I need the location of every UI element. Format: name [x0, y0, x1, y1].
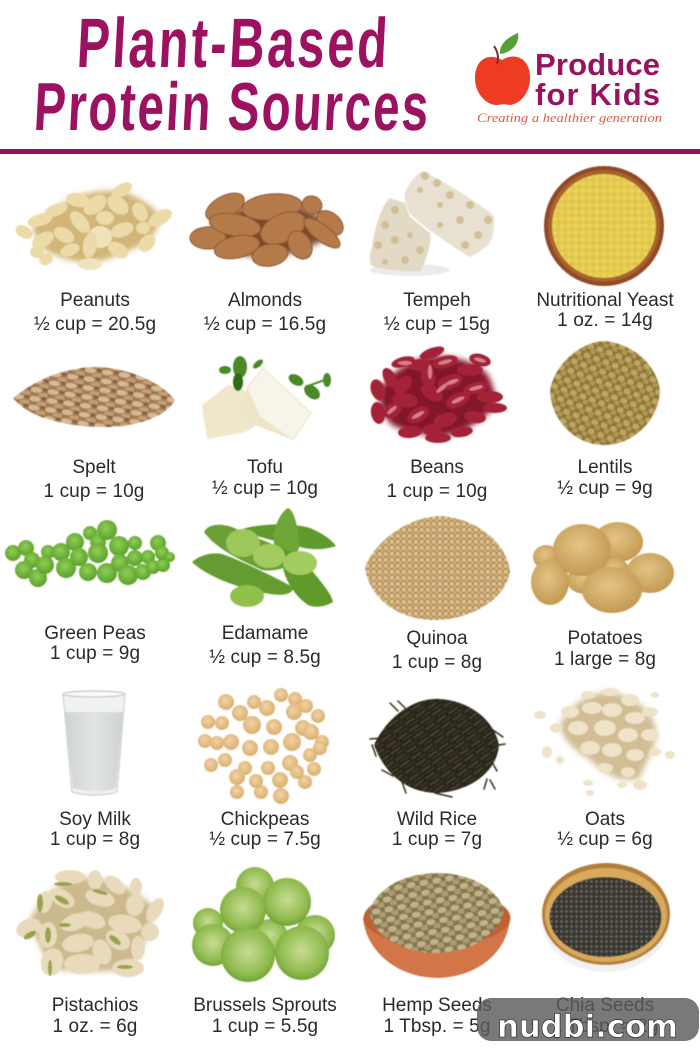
label: chickpeas [209, 809, 321, 850]
title: Plant-Based [75, 3, 389, 82]
icon: green peas [5, 520, 175, 587]
label: lentils: ½ cup = 9g [557, 478, 653, 499]
icon: lentils [550, 341, 660, 445]
icon: quinoa [365, 516, 510, 620]
label: lentils [557, 457, 653, 499]
food: spelt [13, 367, 175, 502]
label: almonds [204, 290, 326, 335]
label: potatoes: Potatoes [568, 628, 642, 649]
label: wild rice [392, 809, 482, 850]
food: wild rice [370, 699, 505, 850]
watermark [477, 998, 699, 1045]
label: oats: ½ cup = 6g [557, 829, 653, 850]
label: hemp seeds: Hemp Seeds [382, 995, 492, 1016]
watermark: nudbi.com [497, 1009, 678, 1045]
label: spelt: Spelt [72, 457, 116, 478]
label: oats: Oats [585, 809, 625, 830]
label: beans: Beans [410, 457, 464, 478]
label: tofu: ½ cup = 10g [212, 478, 318, 499]
label: peanuts [34, 290, 156, 335]
food: quinoa [365, 516, 510, 673]
food: hemp seeds [363, 873, 510, 1037]
food: nutritional yeast [536, 166, 674, 331]
logo wordmark [535, 47, 660, 112]
label: edamame: Edamame [222, 623, 308, 644]
label: brussels sprouts: Brussels Sprouts [193, 995, 337, 1016]
food: beans [368, 344, 507, 502]
logo: Produce for Kids [475, 33, 662, 125]
food: brussels sprouts [192, 867, 337, 1037]
label: soy milk [50, 809, 140, 850]
label: tempeh: ½ cup = 15g [384, 314, 490, 335]
label: chia seeds: 1 Tbsp. = 2g [551, 1016, 659, 1037]
label: peanuts: ½ cup = 20.5g [34, 314, 156, 335]
label: brussels sprouts [193, 995, 337, 1037]
label: lentils: Lentils [578, 457, 632, 478]
food: tofu [203, 356, 331, 499]
label: tofu [212, 457, 318, 499]
food: almonds [190, 187, 348, 335]
food: oats [534, 688, 675, 850]
icon: spelt grains [13, 367, 175, 427]
label: pistachios [52, 995, 138, 1037]
label: oats [557, 809, 653, 850]
label: peanuts: Peanuts [60, 290, 130, 311]
label: chia seeds: Chia Seeds [556, 995, 654, 1016]
icon: wild rice [370, 699, 505, 797]
label: quinoa: Quinoa [406, 628, 468, 649]
label: hemp seeds: 1 Tbsp. = 5g [383, 1016, 491, 1037]
icon: kidney beans [368, 344, 507, 443]
icon: potatoes [531, 522, 674, 613]
label: quinoa: 1 cup = 8g [392, 652, 482, 673]
food: edamame [192, 508, 336, 668]
label: almonds: Almonds [228, 290, 302, 311]
label: tempeh: Tempeh [403, 290, 471, 311]
icon: almonds [190, 187, 348, 269]
label: potatoes [554, 628, 656, 670]
label: green peas: Green Peas [44, 623, 146, 644]
label: nutritional yeast: Nutritional Yeast [536, 290, 674, 311]
label: wild rice: Wild Rice [397, 809, 477, 830]
icon: edamame pods [192, 508, 336, 607]
label: soy milk: 1 cup = 8g [50, 829, 140, 850]
label: beans [387, 457, 487, 502]
label: chickpeas: ½ cup = 7.5g [209, 829, 321, 850]
food: chickpeas [198, 688, 329, 850]
food: tempeh [370, 171, 494, 335]
label: chia seeds [551, 995, 659, 1037]
food: chia seeds [542, 863, 670, 1037]
icon: pistachios [14, 870, 168, 978]
label: hemp seeds [382, 995, 492, 1037]
icon: glass of soy milk [63, 691, 125, 795]
label: nutritional yeast [536, 290, 674, 331]
food: pistachios [14, 870, 168, 1037]
icon: peanuts [13, 179, 175, 270]
label: nutritional yeast: 1 oz. = 14g [557, 310, 653, 331]
label: wild rice: 1 cup = 7g [392, 829, 482, 850]
icon: apple [475, 33, 530, 105]
food: lentils [550, 341, 660, 499]
title [32, 3, 430, 145]
icon: tempeh [370, 171, 494, 276]
food: peanuts [13, 179, 175, 335]
label: spelt: 1 cup = 10g [44, 481, 144, 502]
logo wordmark: for Kids [535, 77, 660, 112]
title: Protein Sources [32, 70, 430, 145]
label: green peas: 1 cup = 9g [50, 643, 140, 664]
icon: bowl of yeast [544, 166, 664, 286]
logo wordmark: Produce [535, 47, 660, 82]
food: potatoes [531, 522, 674, 670]
label: pistachios: 1 oz. = 6g [53, 1016, 137, 1037]
label: green peas [44, 623, 146, 664]
food: green peas [5, 520, 175, 664]
label: spelt [44, 457, 144, 502]
label: beans: 1 cup = 10g [387, 481, 487, 502]
label: pistachios: Pistachios [52, 995, 138, 1016]
logo tagline: Creating a healthier generation [477, 110, 662, 125]
icon: tofu [203, 356, 331, 440]
label: brussels sprouts: 1 cup = 5.5g [212, 1016, 318, 1037]
label: edamame: ½ cup = 8.5g [209, 647, 321, 668]
icon: brussels sprouts [192, 867, 335, 982]
icon: chickpeas [198, 688, 329, 804]
label: potatoes: 1 large = 8g [554, 649, 656, 670]
label: tempeh [384, 290, 490, 335]
label: edamame [209, 623, 321, 668]
label: quinoa [392, 628, 482, 673]
icon: bowl of hemp seeds [363, 873, 510, 978]
header rule [0, 149, 700, 154]
label: almonds: ½ cup = 16.5g [204, 314, 326, 335]
label: chickpeas: Chickpeas [221, 809, 309, 830]
label: soy milk: Soy Milk [59, 809, 131, 830]
food: soy milk [50, 691, 140, 850]
icon: rolled oats [534, 688, 675, 796]
label: tofu: Tofu [247, 457, 283, 478]
icon: bowl of chia seeds [542, 863, 670, 972]
